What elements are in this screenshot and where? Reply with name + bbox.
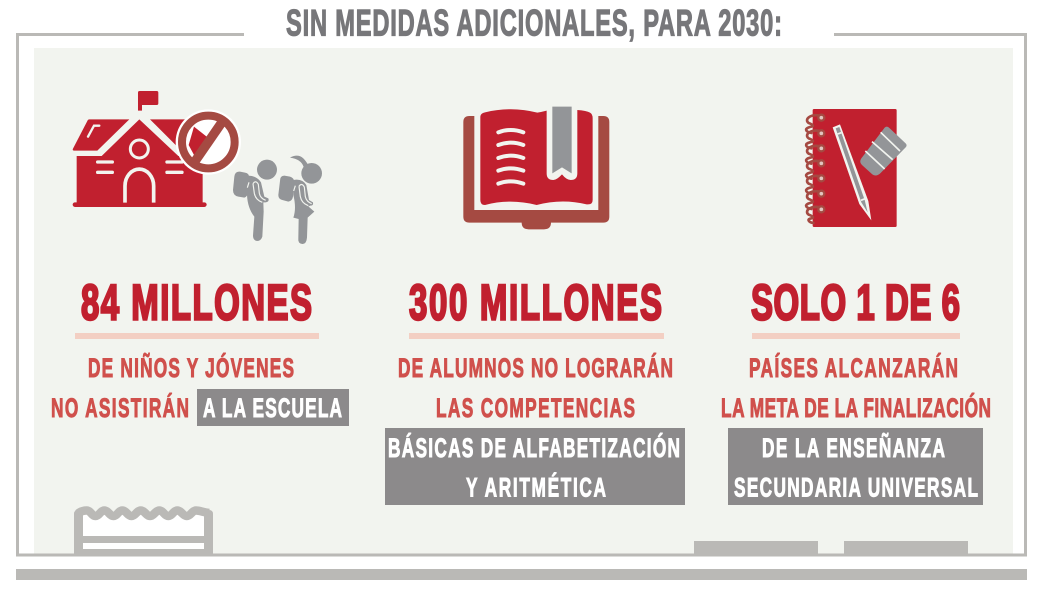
icon: pencil bbox=[833, 124, 871, 220]
column 3 text line: PAÍSES ALCANZARÁN bbox=[749, 352, 958, 383]
icon: school building bbox=[73, 119, 207, 207]
column 3 rule bbox=[752, 333, 960, 339]
column 2 highlight text: BÁSICAS DE ALFABETIZACIÓN bbox=[388, 432, 680, 463]
column 3 highlight box bbox=[728, 428, 983, 505]
icon: eraser bbox=[860, 127, 907, 176]
column 2 rule bbox=[409, 333, 664, 339]
column 1 highlight box bbox=[197, 389, 349, 426]
column 2 headline: 300 MILLONES bbox=[409, 275, 662, 330]
column 3 text line: LA META DE LA FINALIZACIÓN bbox=[721, 392, 991, 423]
bottom block right bbox=[844, 541, 968, 556]
icon: bookmark bbox=[552, 107, 572, 173]
bottom band bbox=[16, 569, 1027, 580]
icon: book cover bbox=[463, 116, 609, 229]
column 2 text line: DE ALUMNOS NO LOGRARÁN bbox=[398, 352, 673, 383]
column 3 highlight text: DE LA ENSEÑANZA bbox=[762, 432, 945, 463]
icon: children with backpacks bbox=[233, 156, 322, 244]
title: SIN MEDIDAS ADICIONALES, PARA 2030: bbox=[286, 2, 782, 44]
column 3 headline: SOLO 1 DE 6 bbox=[751, 275, 960, 330]
column 1 text line: NO ASISTIRÁN bbox=[51, 392, 189, 423]
icon: child one bbox=[233, 160, 277, 241]
icon: book pages bbox=[480, 109, 593, 205]
panel: background bbox=[34, 48, 1013, 555]
icon: open book bbox=[463, 107, 609, 229]
column 2 highlight text: Y ARITMÉTICA bbox=[466, 471, 606, 502]
icon: notebook and pencil bbox=[806, 109, 907, 227]
column 1 rule bbox=[75, 333, 319, 339]
icon: prohibition sign bbox=[176, 109, 241, 175]
icon: text lines bbox=[498, 130, 523, 184]
column 1 text line: DE NIÑOS Y JÓVENES bbox=[88, 352, 294, 383]
icon: child two bbox=[278, 156, 322, 244]
icon: flag bbox=[138, 91, 158, 111]
icon: spiral binding bbox=[806, 115, 824, 223]
column 2 highlight box bbox=[385, 428, 685, 505]
column 2 text line: LAS COMPETENCIAS bbox=[436, 392, 635, 423]
icon: bottom bed shape bbox=[74, 510, 213, 555]
column 3 highlight text: SECUNDARIA UNIVERSAL bbox=[734, 471, 978, 502]
icon: school with prohibition sign bbox=[73, 91, 241, 207]
bottom block left bbox=[694, 541, 818, 556]
column 1 headline: 84 MILLONES bbox=[81, 275, 312, 330]
icon: notebook cover bbox=[813, 109, 897, 227]
column 1 highlight text: A LA ESCUELA bbox=[203, 392, 342, 423]
